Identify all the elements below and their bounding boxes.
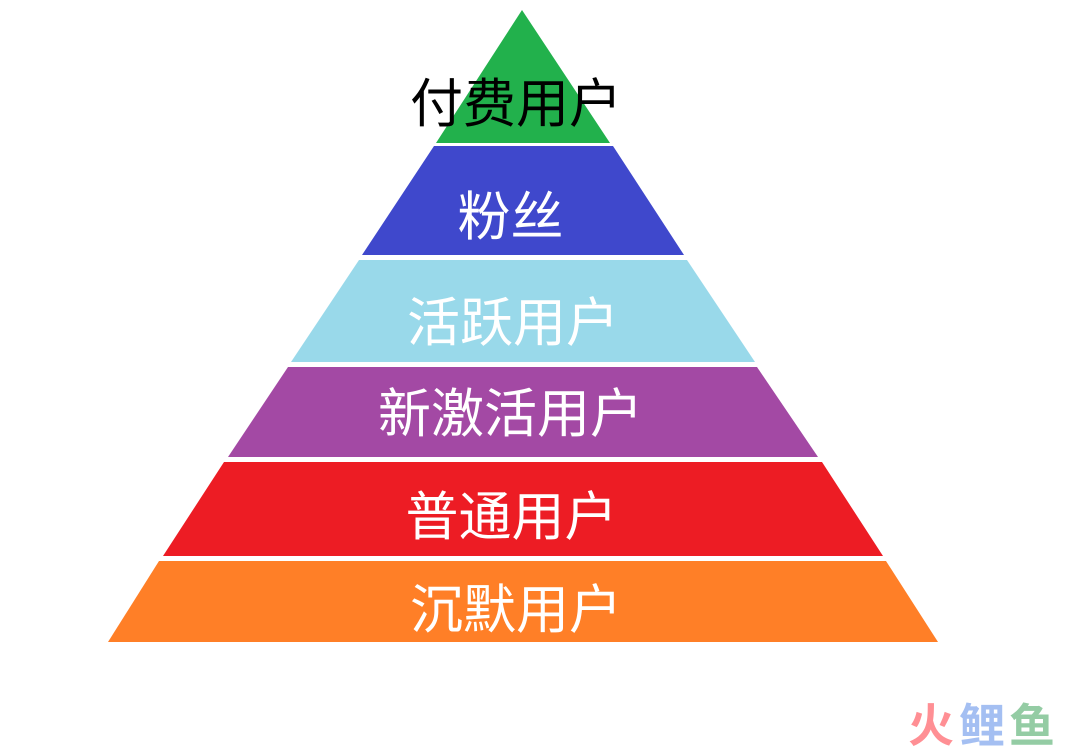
tier: 新激活用户 <box>228 367 818 457</box>
tier: 普通用户 <box>163 462 883 556</box>
tier: 沉默用户 <box>108 561 938 642</box>
tier: 活跃用户: 活跃用户 <box>407 294 619 353</box>
tier: 付费用户: 付费用户 <box>410 75 622 134</box>
tier: 粉丝 <box>362 146 684 255</box>
tier: 沉默用户: 沉默用户 <box>410 581 622 640</box>
watermark logo <box>908 700 1055 750</box>
tier: 活跃用户 <box>291 260 755 362</box>
tier: 普通用户: 普通用户 <box>406 488 618 547</box>
tier: 新激活用户: 新激活用户 <box>378 385 643 444</box>
tier: 付费用户 <box>410 10 622 143</box>
tier: 粉丝: 粉丝 <box>458 188 564 247</box>
